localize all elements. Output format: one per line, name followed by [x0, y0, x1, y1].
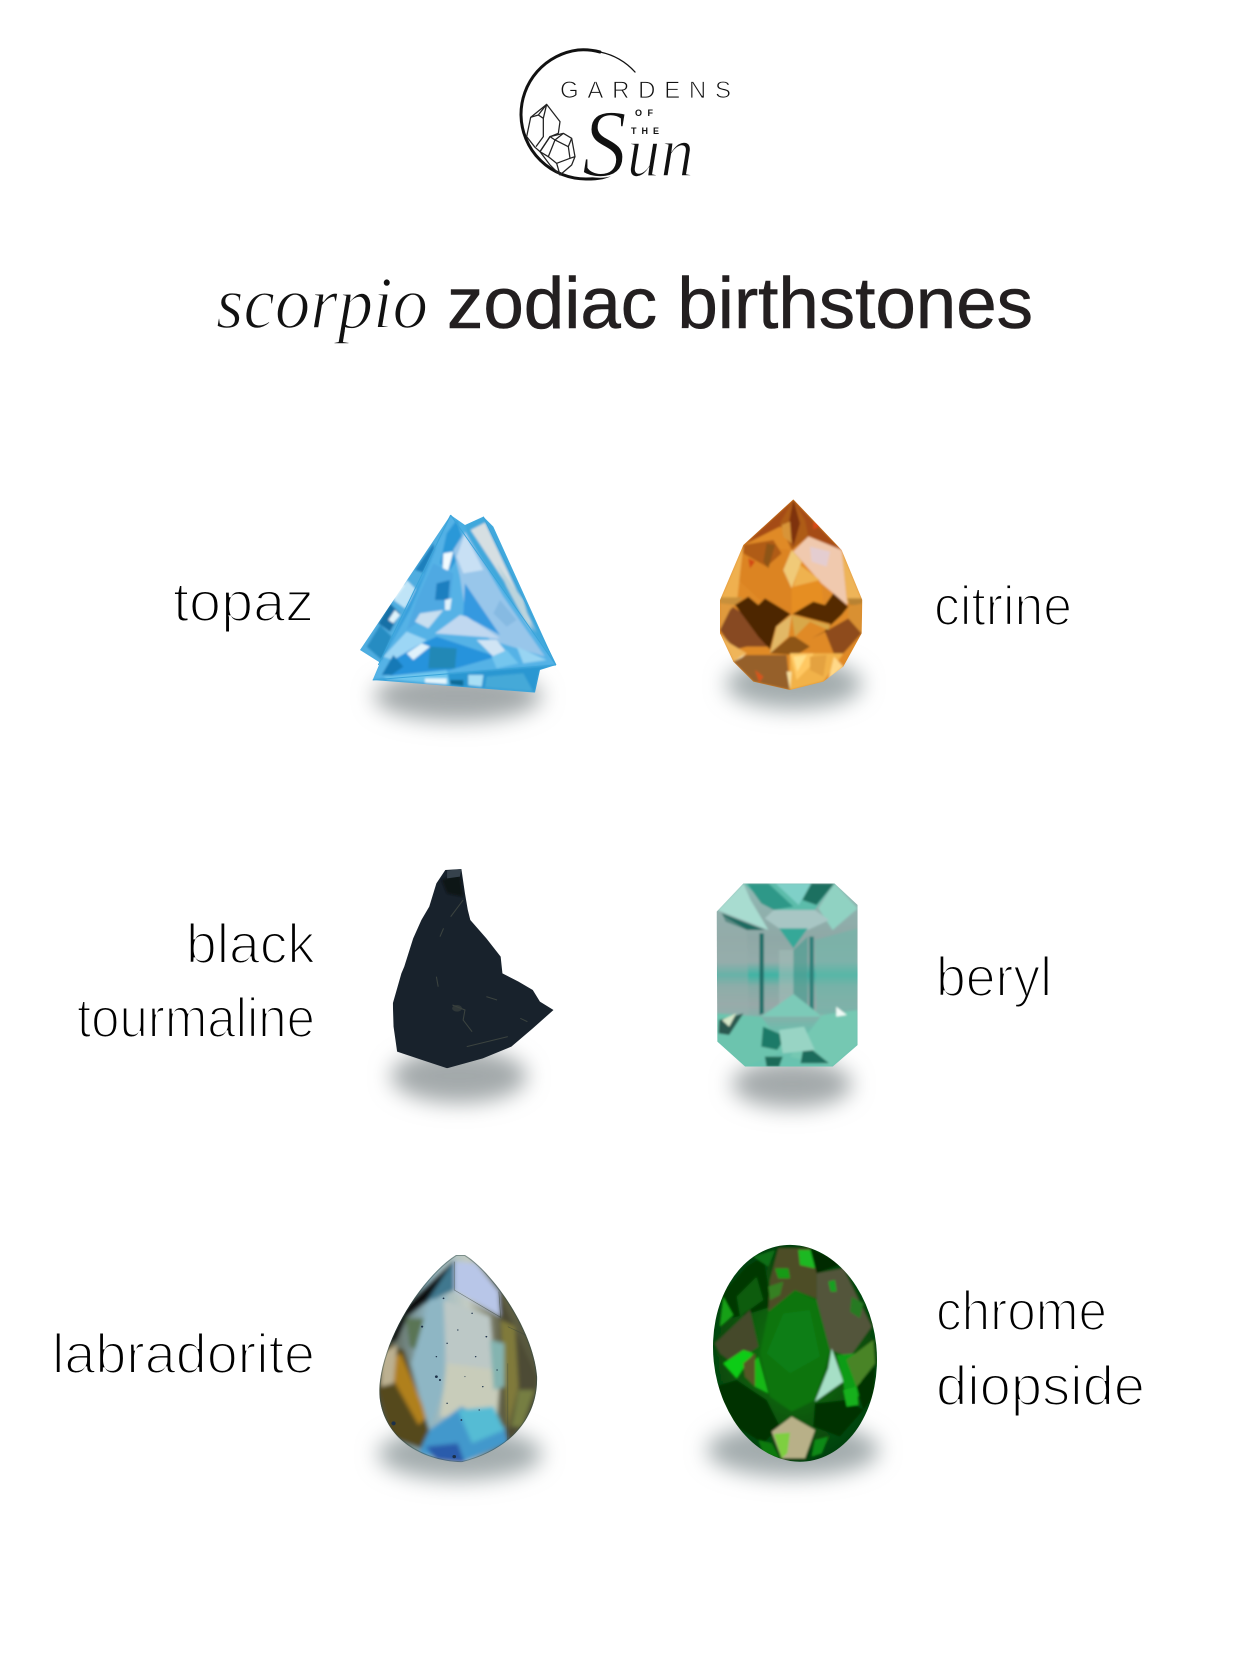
front: [373, 515, 556, 679]
gem: chrome diopside: [700, 1240, 890, 1477]
gem: citrine: [710, 490, 877, 709]
label: chrome diopside: [936, 1279, 1145, 1417]
gem: beryl: [715, 882, 859, 1108]
back left facets: [360, 515, 451, 663]
labradorite shadow: [378, 1428, 542, 1480]
title main words: zodiac birthstones: [447, 264, 1033, 344]
title script word: scorpio: [216, 263, 428, 345]
tourmaline stone: [392, 869, 554, 1068]
logo crystals icon: [527, 104, 575, 175]
label: topaz: topaz: [173, 570, 314, 633]
back right facets: [466, 518, 549, 652]
label line: chrome: chrome: [936, 1279, 1107, 1342]
label: citrine: citrine: [934, 574, 1072, 637]
gem: black tourmaline: [380, 869, 554, 1117]
back bottom: [458, 684, 462, 685]
title: [216, 263, 1033, 345]
logo word Gardens: GARDENS: [560, 77, 731, 104]
beryl shadow: [732, 1060, 852, 1108]
tourmaline shadow: [391, 1049, 527, 1103]
logo: Gardens of the Sun: [521, 50, 731, 197]
label: black tourmaline: [77, 912, 316, 1049]
label line: diopside: diopside: [936, 1354, 1145, 1417]
logo word Sun: Sun: [582, 90, 694, 197]
logo word the: THE: [631, 126, 659, 136]
chrome diopside stone: [713, 1244, 877, 1462]
chrome diopside shadow: [707, 1423, 879, 1477]
beryl step lines: [759, 933, 764, 1015]
topaz stone: [360, 514, 556, 692]
gem: topaz: [360, 514, 556, 735]
beryl crown facets: [743, 883, 834, 910]
label line: tourmaline: tourmaline: [77, 986, 315, 1049]
beryl pavilion facets: [761, 994, 822, 1017]
topaz shadow: [374, 671, 542, 721]
beryl stone: [715, 882, 859, 1068]
citrine shadow: [726, 659, 862, 709]
label: labradorite: labradorite: [52, 1322, 315, 1385]
labradorite stone: [376, 1250, 543, 1467]
label: beryl: beryl: [936, 945, 1052, 1008]
citrine stone: [720, 500, 862, 690]
label line: black: black: [186, 912, 316, 975]
gem: labradorite: [376, 1250, 543, 1480]
logo word of: OF: [635, 108, 654, 118]
logo ring: [521, 50, 635, 179]
front bottom band: [454, 666, 551, 684]
